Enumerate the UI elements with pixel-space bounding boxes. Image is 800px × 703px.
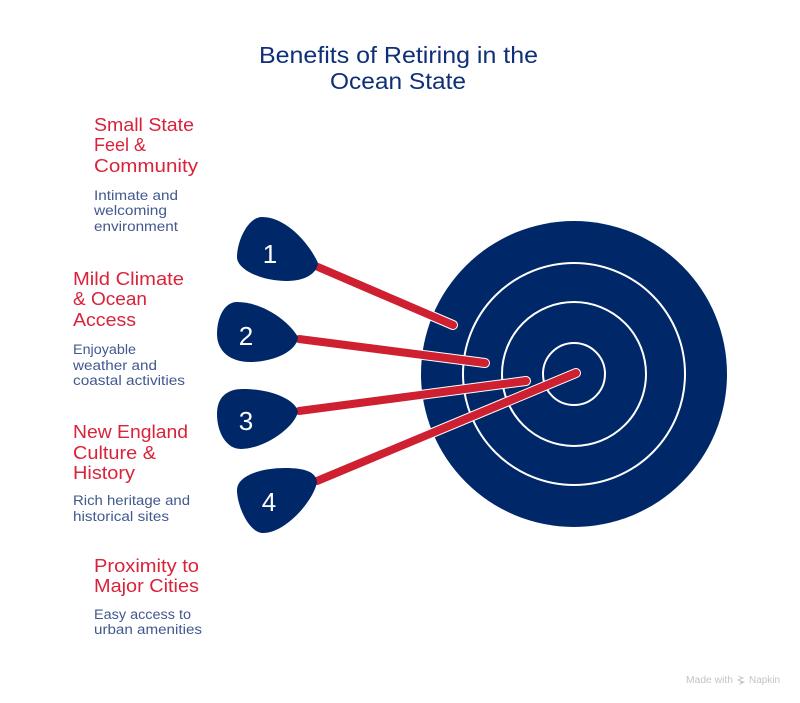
- watermark: [686, 675, 780, 686]
- heading: proximity to major cities: Major Cities: [94, 576, 199, 596]
- heading: proximity to major cities: [94, 556, 199, 596]
- description: new england culture and history: Rich heritage and: [73, 493, 190, 508]
- arrow 4: [237, 373, 576, 533]
- description: small state feel and community: [93, 188, 178, 234]
- description: new england culture and history: historical sites: [73, 509, 169, 524]
- description: small state feel and community: welcoming: [93, 203, 167, 218]
- title: [259, 42, 538, 94]
- heading: small state feel and community: Feel &: [94, 135, 146, 155]
- description: new england culture and history: [73, 493, 190, 524]
- heading: mild climate and ocean access: & Ocean: [73, 289, 147, 309]
- heading: new england culture and history: [73, 422, 188, 483]
- heading: mild climate and ocean access: [73, 269, 184, 330]
- description: proximity to major cities: Easy access to: [94, 607, 191, 622]
- pick 1: 1: [263, 239, 277, 269]
- description: mild climate and ocean access: weather and: [72, 358, 157, 373]
- description: proximity to major cities: urban amenities: [94, 622, 202, 637]
- watermark: Made with: [686, 675, 733, 686]
- description: mild climate and ocean access: [72, 342, 185, 388]
- description: mild climate and ocean access: coastal activities: [73, 373, 185, 388]
- title: Benefits of Retiring in the: [259, 42, 538, 68]
- title: Ocean State: [330, 68, 466, 94]
- pick 2: [217, 302, 298, 362]
- watermark: Napkin: [749, 675, 780, 686]
- heading: mild climate and ocean access: Mild Climate: [73, 269, 184, 289]
- text block: new england culture and history: [73, 422, 190, 524]
- description: small state feel and community: environment: [94, 219, 178, 234]
- target: [421, 221, 727, 527]
- pick 3: [217, 389, 298, 449]
- arrow 1: [237, 217, 453, 325]
- pick 1: [237, 217, 318, 281]
- description: proximity to major cities: [94, 607, 202, 637]
- text block: mild climate and ocean access: [72, 269, 185, 388]
- pick 3: 3: [239, 406, 253, 436]
- heading: small state feel and community: Community: [94, 156, 198, 176]
- pick 2: 2: [239, 321, 253, 351]
- arrow 3: [217, 381, 526, 449]
- heading: new england culture and history: History: [73, 463, 135, 483]
- pick 4: 4: [262, 487, 276, 517]
- pick 4: [237, 468, 317, 533]
- heading: proximity to major cities: Proximity to: [94, 556, 199, 576]
- heading: mild climate and ocean access: Access: [73, 310, 136, 330]
- arrow 2: [217, 302, 485, 363]
- heading: new england culture and history: Culture &: [73, 443, 156, 463]
- heading: small state feel and community: [94, 115, 198, 176]
- text block: small state feel and community: [93, 115, 198, 234]
- text block: proximity to major cities: [94, 556, 202, 637]
- icon: napkin logo: [737, 675, 745, 685]
- heading: small state feel and community: Small State: [94, 115, 194, 135]
- heading: new england culture and history: New England: [73, 422, 188, 442]
- description: small state feel and community: Intimate and: [94, 188, 178, 203]
- description: mild climate and ocean access: Enjoyable: [73, 342, 136, 357]
